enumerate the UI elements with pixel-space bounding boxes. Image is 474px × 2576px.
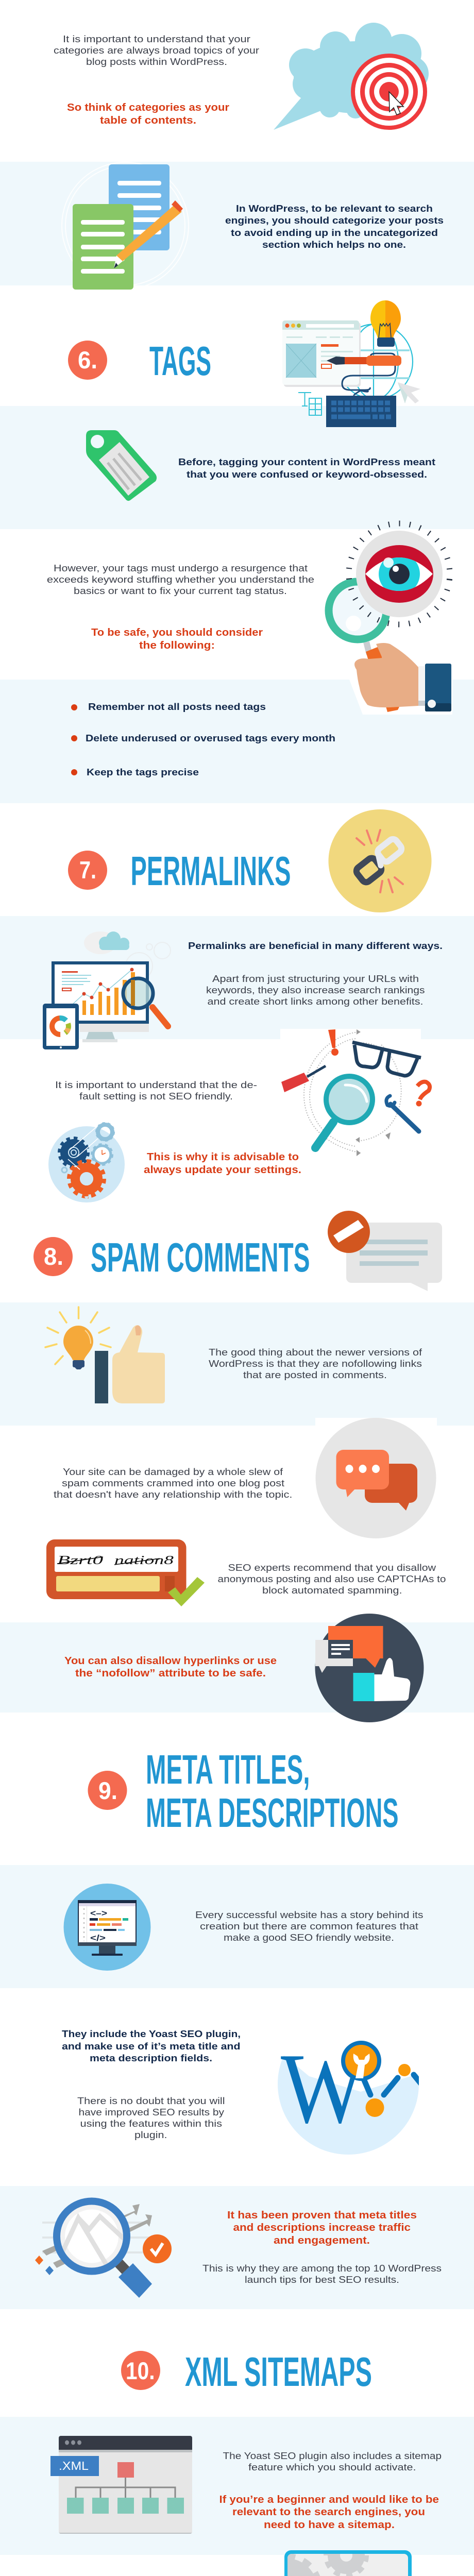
heading: 8 spam comments: 8. bbox=[44, 1243, 63, 1270]
heading: 9 meta titles, meta descriptions bbox=[88, 1747, 399, 1836]
tree connectors bbox=[76, 2478, 175, 2498]
heading: 10 XML sitemaps: 10. bbox=[126, 2357, 155, 2384]
text: Yoast plugin bbox=[62, 2028, 241, 2063]
keyboard bbox=[326, 396, 396, 427]
icon: gears in circle bbox=[48, 1124, 125, 1202]
text: launch tips: launch tips for best SEO results. bbox=[245, 2275, 399, 2285]
orange gear bbox=[69, 1161, 104, 1196]
bulb bbox=[63, 1326, 93, 1369]
icon: hand holding magnifier with eye bbox=[329, 518, 455, 715]
text: nofollowing links: WordPress is that they are nofollowing links bbox=[209, 1359, 422, 1369]
panel: band sitemap bbox=[0, 2417, 474, 2555]
monitor bbox=[53, 963, 149, 1042]
text: site damaged bbox=[54, 1467, 293, 1500]
text: meta titles proven callout: and descriptions increase traffic bbox=[233, 2222, 411, 2233]
panel: band permalinks bbox=[0, 916, 474, 1039]
text: URLs with keywords: Apart from just structuring your URLs with bbox=[212, 974, 419, 984]
sleeve bbox=[95, 1351, 108, 1403]
magnifier bbox=[123, 978, 168, 1026]
target bbox=[351, 54, 427, 130]
cable bbox=[342, 353, 395, 396]
text: site damaged: spam comments crammed into one blog post bbox=[62, 1478, 284, 1488]
arrows bbox=[42, 2204, 152, 2268]
window bbox=[59, 2436, 192, 2534]
text: successful website bbox=[195, 1910, 424, 1943]
text: successful website: make a good SEO friendly website. bbox=[224, 1933, 394, 1943]
closing tag glyphs: </> bbox=[90, 1933, 106, 1943]
text: URLs with keywords bbox=[206, 974, 425, 1007]
.XML label: .XML bbox=[59, 2459, 89, 2472]
cyan cuff bbox=[353, 1673, 374, 1701]
browser window bbox=[282, 320, 361, 387]
text: before tagging: that you were confused or keyword-obsessed. bbox=[187, 469, 427, 480]
check mark bbox=[168, 1577, 205, 1606]
handle bbox=[116, 2261, 152, 2298]
text: categories intro: blog posts within WordPress. bbox=[86, 57, 227, 67]
text: tags resurgence: However, your tags must undergo a resurgence that bbox=[54, 563, 308, 573]
panel: band categories bbox=[0, 162, 474, 285]
bullet: delete underused: Delete underused or overused tags every month bbox=[86, 733, 335, 743]
text: nofollowing links: that are posted in comments. bbox=[243, 1370, 387, 1380]
text: nofollowing links bbox=[209, 1347, 422, 1380]
cloud bbox=[274, 23, 429, 130]
heading: 7 permalinks: PERMALINKS bbox=[131, 848, 291, 894]
text: nofollowing links: The good thing about the newer versions of bbox=[209, 1347, 422, 1358]
text: tags resurgence: exceeds keyword stuffing whether you understand the bbox=[47, 574, 314, 585]
glasses bbox=[352, 1042, 421, 1076]
radiating ticks bbox=[344, 518, 455, 630]
dark bubble bbox=[365, 1464, 417, 1511]
icon: monitor with gears and magnifier bbox=[284, 2550, 412, 2576]
check badge bbox=[143, 2234, 172, 2263]
text: beginner sitemap callout: If you’re a beginner and would like to be bbox=[219, 2494, 439, 2505]
icon: tools, glasses and magnifier bbox=[280, 1029, 430, 1156]
belt bbox=[68, 1126, 98, 1170]
rays bbox=[45, 1307, 111, 1364]
T and table icon bbox=[298, 393, 321, 415]
dotted orbit bbox=[304, 1029, 401, 1156]
small left gear bbox=[62, 1167, 67, 1173]
thumbnail bbox=[135, 1325, 141, 1335]
icon: broken chain link bbox=[329, 809, 432, 912]
text: successful website: Every successful website has a story behind its bbox=[195, 1910, 424, 1920]
text: CAPTCHA recommendation: anonymous posting and also use CAPTCHAs to bbox=[217, 1574, 446, 1584]
gray bubble bbox=[315, 1640, 353, 1673]
exclamation mark bbox=[328, 1029, 338, 1056]
cursor bbox=[389, 92, 403, 115]
text: default setting: It is important to understand that the de- bbox=[55, 1080, 257, 1090]
icon: browser, globe, bulb, pen and keyboard bbox=[282, 300, 420, 427]
sleeve bbox=[418, 664, 451, 711]
code glyphs: <–> bbox=[90, 1908, 107, 1918]
text: Yoast sitemap feature: feature which you should activate. bbox=[248, 2462, 416, 2472]
text: Yoast plugin: They include the Yoast SEO plugin, bbox=[62, 2028, 241, 2039]
heading: 10 XML sitemaps bbox=[121, 2349, 372, 2395]
text: default setting bbox=[55, 1080, 257, 1101]
question mark bbox=[417, 1082, 430, 1105]
text: URLs with keywords: and create short links among other benefits. bbox=[207, 996, 424, 1007]
cursor arrow bbox=[398, 382, 420, 403]
trend line bbox=[72, 968, 134, 1005]
hand bbox=[354, 643, 418, 707]
clouds and faint gears bbox=[84, 931, 171, 979]
heading: 8 spam comments bbox=[33, 1234, 310, 1280]
icon: WordPress W with magnifier bbox=[278, 2041, 419, 2155]
panel: band meta intro bbox=[0, 1865, 474, 1988]
icon: cloud with target bbox=[274, 23, 429, 130]
text: to be safe callout bbox=[91, 627, 263, 651]
heading: 8 spam comments: SPAM COMMENTS bbox=[91, 1234, 310, 1280]
heading: 7 permalinks: 7. bbox=[79, 856, 96, 884]
screwdriver bbox=[281, 1066, 326, 1092]
text: improved SEO results: using the features within this bbox=[80, 2119, 222, 2129]
panel: band nofollow bbox=[0, 1622, 474, 1713]
text: beginner sitemap callout: need to have a sitemap. bbox=[264, 2519, 395, 2531]
orange bubble bbox=[328, 1626, 383, 1668]
captcha words: Bzrt0 bbox=[57, 1554, 103, 1567]
text: improved SEO results: have improved SEO results by bbox=[78, 2107, 224, 2117]
text: Yoast plugin: meta description fields. bbox=[90, 2053, 212, 2063]
icon: comment bubble with no sign bbox=[328, 1211, 442, 1291]
root node bbox=[117, 2462, 134, 2478]
screen bbox=[287, 2554, 408, 2576]
text: beginner sitemap callout: relevant to the search engines, you bbox=[232, 2506, 425, 2518]
text: CAPTCHA recommendation: block automated spamming. bbox=[262, 1585, 402, 1596]
small top gear bbox=[97, 1124, 113, 1140]
magnifier ring bbox=[329, 582, 400, 712]
diamonds bbox=[35, 2256, 43, 2265]
heading: 6 tags: TAGS bbox=[149, 338, 211, 384]
lens bbox=[57, 2201, 127, 2272]
text: beginner sitemap callout bbox=[219, 2494, 439, 2531]
icon: code monitor in blue circle bbox=[64, 1884, 150, 1971]
bullet: keep precise: Keep the tags precise bbox=[87, 767, 199, 777]
text: improved SEO results bbox=[77, 2096, 225, 2140]
icon: sitemap browser window bbox=[50, 2436, 192, 2534]
panel: band meta proof bbox=[0, 2186, 474, 2309]
text: meta titles proven callout bbox=[227, 2210, 417, 2246]
text: to be safe callout: To be safe, you should consider bbox=[91, 627, 263, 638]
text: categorize posts: section which helps no one. bbox=[262, 239, 406, 250]
orange dots and sticks bbox=[366, 2064, 422, 2117]
icon: analytics monitor and tablet bbox=[43, 931, 171, 1049]
text: categorize posts bbox=[225, 203, 444, 250]
text: categories intro: categories are always broad topics of your bbox=[54, 45, 259, 56]
code rows bbox=[90, 1918, 128, 1931]
text: categories callout bbox=[67, 102, 229, 126]
text: permalinks beneficial: Permalinks are beneficial in many different ways. bbox=[188, 940, 443, 951]
text: Yoast sitemap feature bbox=[223, 2451, 442, 2472]
text: tags resurgence bbox=[47, 563, 314, 596]
letter W: W bbox=[281, 2033, 366, 2144]
text: meta titles proven callout: and engagement. bbox=[274, 2235, 370, 2246]
text: meta titles proven callout: It has been proven that meta titles bbox=[227, 2210, 417, 2221]
text: categorize posts: engines, you should categorize your posts bbox=[225, 215, 444, 226]
clock gear bbox=[92, 1144, 112, 1165]
heading: 7 permalinks bbox=[68, 848, 291, 894]
text: categories callout: table of contents. bbox=[100, 115, 196, 126]
text: disallow hyperlinks callout: the “nofollow” attribute to be safe. bbox=[75, 1668, 266, 1679]
green document bbox=[73, 204, 133, 290]
text: site damaged: that doesn't have any relationship with the topic. bbox=[54, 1489, 293, 1500]
white hand bbox=[374, 1658, 410, 1701]
heading: 6 tags bbox=[68, 338, 211, 384]
panel: band spam intro bbox=[0, 1302, 474, 1426]
text: update settings callout: always update your settings. bbox=[144, 1164, 301, 1176]
text: categories intro bbox=[54, 34, 259, 67]
text: launch tips: This is why they are among the top 10 WordPress bbox=[202, 2263, 442, 2274]
large magnifier bbox=[315, 1076, 373, 1148]
cuff bbox=[418, 666, 425, 706]
blue diamond bbox=[45, 2266, 54, 2275]
text: Yoast sitemap feature: The Yoast SEO plugin also includes a sitemap bbox=[223, 2451, 442, 2461]
text: tags resurgence: basics or want to fix your current tag status. bbox=[74, 586, 287, 596]
text: CAPTCHA recommendation bbox=[217, 1563, 446, 1596]
monitor body bbox=[78, 1900, 137, 1956]
light bulb bbox=[370, 300, 401, 347]
heading: 9 meta titles, meta descriptions: 9. bbox=[98, 1777, 117, 1804]
tablet with donut chart bbox=[43, 1004, 79, 1049]
light bubble bbox=[336, 1450, 389, 1497]
eye lens bbox=[356, 531, 443, 617]
text: improved SEO results: There is no doubt that you will bbox=[77, 2096, 225, 2106]
magnifier bbox=[343, 2043, 379, 2095]
text: disallow hyperlinks callout bbox=[64, 1655, 277, 1679]
captcha words: nation8 bbox=[114, 1554, 174, 1567]
text: site damaged: Your site can be damaged by a whole slew of bbox=[63, 1467, 283, 1477]
captcha words bbox=[57, 1554, 174, 1567]
heading: 6 tags: 6. bbox=[78, 346, 97, 374]
dots bbox=[345, 1465, 380, 1473]
bar chart bbox=[82, 972, 135, 1015]
.XML label bbox=[50, 2456, 99, 2476]
grid lines bbox=[42, 2223, 151, 2252]
icon: green price tag bbox=[86, 430, 157, 501]
text: update settings callout bbox=[144, 1151, 301, 1176]
text: Yoast plugin: and make use of it’s meta title and bbox=[62, 2041, 240, 2052]
icon: bulb and thumbs up bbox=[45, 1307, 165, 1403]
text: launch tips bbox=[202, 2263, 442, 2285]
text: categories intro: It is important to understand that your bbox=[63, 34, 250, 44]
text: improved SEO results: plugin. bbox=[134, 2130, 167, 2140]
text: before tagging bbox=[178, 456, 435, 480]
wrench bbox=[386, 1096, 419, 1131]
text: update settings callout: This is why it is advisable to bbox=[147, 1151, 299, 1163]
text: default setting: fault setting is not SEO friendly. bbox=[79, 1091, 233, 1101]
hand bbox=[112, 1325, 165, 1403]
icon: magnifier with rising arrows bbox=[35, 2201, 172, 2298]
globe bbox=[335, 324, 413, 399]
panel: band tags intro bbox=[0, 406, 474, 529]
text: categorize posts: In WordPress, to be relevant to search bbox=[236, 203, 433, 214]
pencil bbox=[114, 200, 183, 268]
text: CAPTCHA recommendation: SEO experts recommend that you disallow bbox=[228, 1563, 436, 1573]
text: categories callout: So think of categories as your bbox=[67, 102, 229, 113]
text: disallow hyperlinks callout: You can also disallow hyperlinks or use bbox=[64, 1655, 277, 1667]
blue document bbox=[109, 164, 170, 250]
text: URLs with keywords: keywords, they also increase search rankings bbox=[206, 985, 425, 995]
text: to be safe callout: the following: bbox=[139, 640, 215, 651]
icon: captcha bbox=[46, 1539, 205, 1606]
icon: chat bubbles in circle bbox=[315, 1418, 437, 1538]
frame bbox=[284, 2550, 412, 2576]
icon: speech bubbles and thumbs up in dark circle bbox=[315, 1614, 424, 1722]
list: tag tips bbox=[71, 701, 335, 777]
text: before tagging: Before, tagging your content in WordPress meant bbox=[178, 456, 435, 467]
gears bbox=[287, 2554, 369, 2576]
heading: 9 meta titles, meta descriptions: META TITLES, bbox=[146, 1747, 310, 1792]
pen bbox=[327, 355, 401, 366]
navy gear bbox=[59, 1138, 88, 1167]
child nodes bbox=[67, 2498, 184, 2514]
text: successful website: creation but there are common features that bbox=[200, 1921, 418, 1931]
panel: band tag tips bbox=[0, 680, 474, 803]
bullet: remember not all posts: Remember not all posts need tags bbox=[88, 701, 266, 712]
text: categorize posts: to avoid ending up in the uncategorized bbox=[231, 227, 438, 238]
icon: documents and pencil bbox=[62, 162, 189, 290]
document lines bbox=[328, 1640, 353, 1658]
